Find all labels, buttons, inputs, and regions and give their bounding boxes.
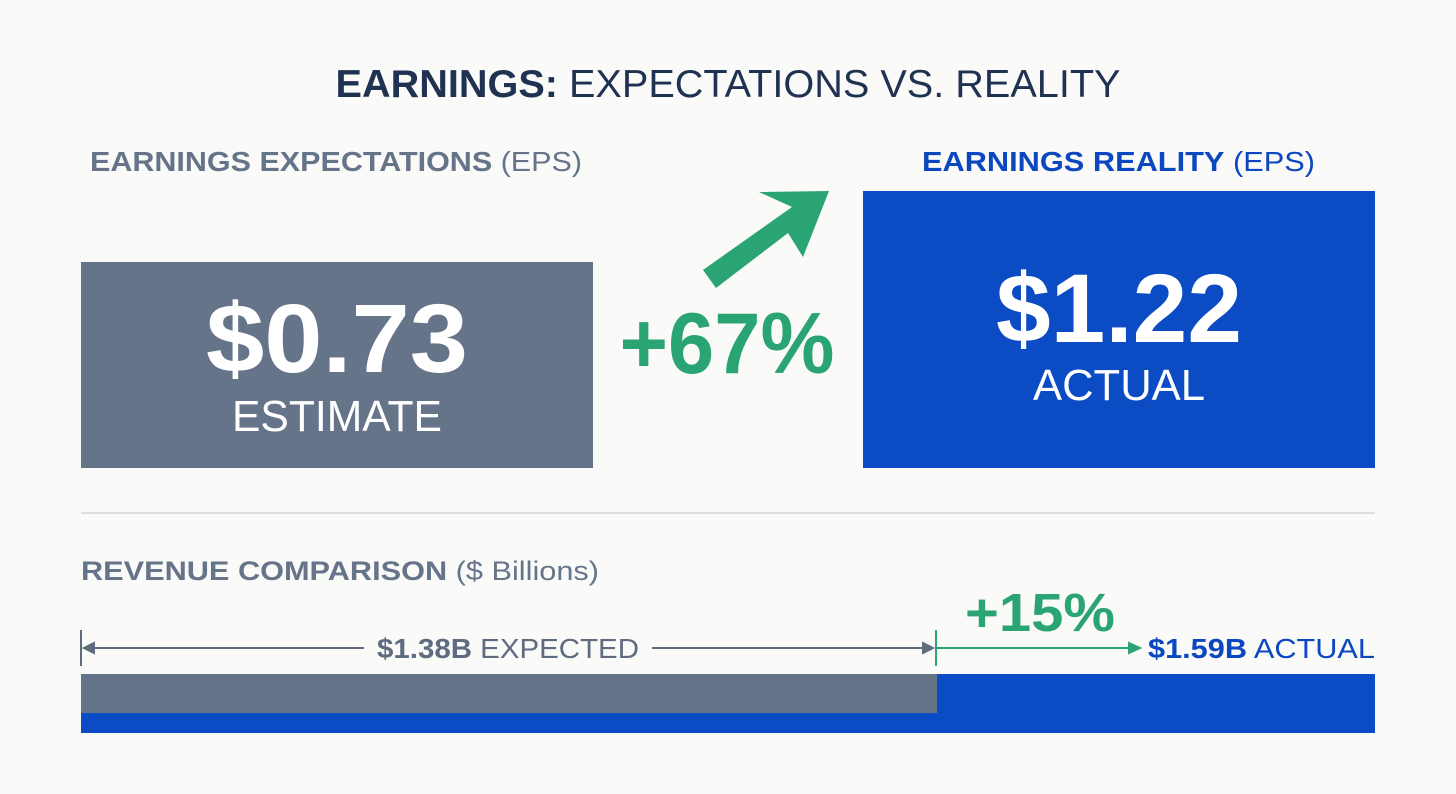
heading: revenue comparison: REVENUE COMPARISON ($ Billions): [81, 556, 599, 586]
label: actual revenue: $1.59B ACTUAL: [1148, 633, 1375, 664]
heading: earnings reality: EARNINGS REALITY (EPS): [922, 146, 1315, 177]
estimate value: $0.73: [206, 284, 468, 393]
bar chart: revenue: [81, 674, 1375, 733]
+15% callout: +15%: [965, 583, 1115, 643]
estimate label: ESTIMATE: [232, 392, 442, 441]
actual label: ACTUAL: [1033, 361, 1205, 410]
actual value: $1.22: [996, 254, 1242, 363]
panel: actual box: [863, 191, 1375, 468]
+67% callout: +67%: [620, 296, 834, 392]
arrow: expected span: [81, 630, 933, 666]
panel: estimate box: [81, 262, 593, 468]
title: EARNINGS: EXPECTATIONS VS. REALITY: [336, 63, 1120, 106]
label: expected revenue: $1.38B EXPECTED: [377, 633, 639, 664]
arrow: growth: [703, 191, 829, 288]
arrow: growth span: [936, 630, 1140, 666]
heading: earnings expectations: EARNINGS EXPECTATIONS (EPS): [90, 146, 582, 177]
